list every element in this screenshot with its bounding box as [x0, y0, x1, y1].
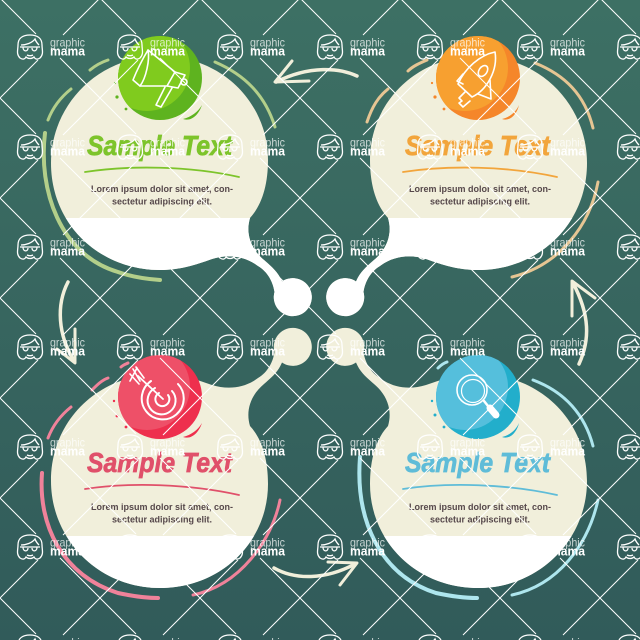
heading: orange: Sample Text: [405, 130, 551, 161]
heading: green: Sample Text: [87, 130, 233, 161]
panel: red blob: [51, 328, 312, 588]
panel: blue blob: [326, 328, 587, 588]
heading: red: Sample Text: [87, 447, 233, 478]
text block: orange: Lorem ipsum dolor sit amet, con-: [409, 184, 551, 194]
red sketch arcs: [42, 363, 280, 598]
underline: blue: [403, 485, 557, 495]
arrow: right, bottom to top: [572, 281, 595, 364]
text block: orange: [409, 184, 551, 206]
underline: green: [85, 168, 239, 177]
text block: blue: sectetur adipiscing elit.: [430, 514, 530, 524]
arrow: bottom, left to right: [274, 562, 357, 585]
icon: rocket badge: [430, 36, 520, 120]
arrow: left, top to bottom: [57, 282, 75, 363]
icon: magnifier badge: [430, 355, 520, 439]
underline: red: [85, 485, 239, 495]
text block: green: sectetur adipiscing elit.: [112, 196, 212, 206]
heading: blue: Sample Text: [405, 447, 551, 478]
icon: target badge: [112, 355, 202, 439]
text block: red: [91, 502, 233, 524]
text block: red: Lorem ipsum dolor sit amet, con-: [91, 502, 233, 512]
text block: orange: sectetur adipiscing elit.: [430, 196, 530, 206]
arrow: top, right to left: [275, 61, 357, 82]
icon: megaphone badge: [114, 36, 202, 120]
orange sketch arcs: [367, 60, 598, 277]
text block: red: sectetur adipiscing elit.: [112, 514, 212, 524]
text block: green: Lorem ipsum dolor sit amet, con-: [91, 184, 233, 194]
text block: green: [91, 184, 233, 206]
panel: orange blob: [326, 56, 587, 316]
text block: blue: Lorem ipsum dolor sit amet, con-: [409, 502, 551, 512]
text block: blue: [409, 502, 551, 524]
underline: orange: [403, 168, 557, 177]
blue sketch arcs: [359, 362, 598, 598]
green sketch arcs: [44, 60, 275, 280]
panel: green blob: [51, 56, 312, 316]
